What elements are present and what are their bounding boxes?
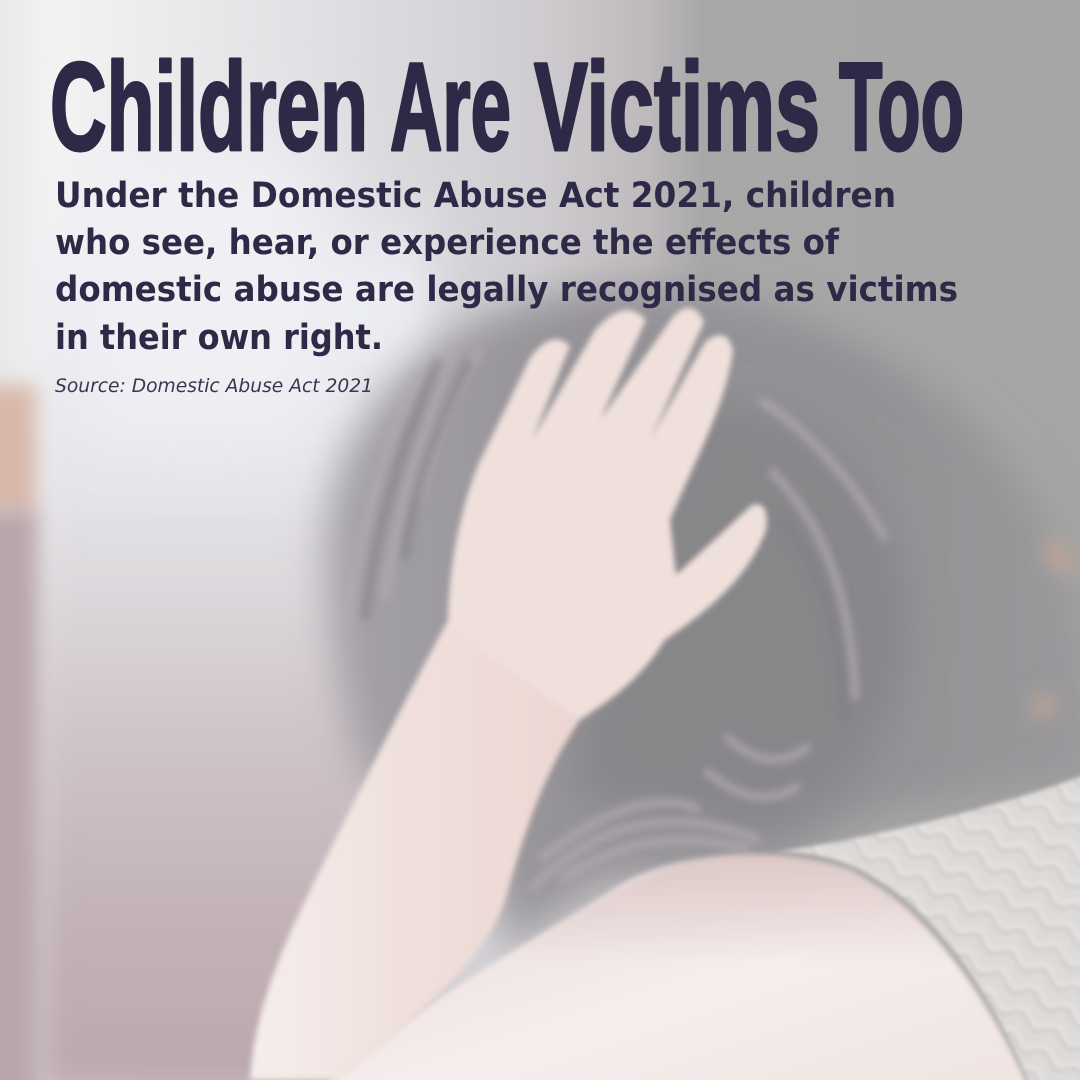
- title: Children: [50, 38, 368, 177]
- hair: [325, 289, 1080, 950]
- body text: who see, hear, or experience the effects of: [55, 223, 840, 263]
- body text: [55, 176, 958, 358]
- shoulder: [320, 854, 1030, 1080]
- title: Are: [390, 38, 511, 177]
- body text: domestic abuse are legally recognised as victims: [55, 270, 958, 310]
- title: Too: [839, 38, 964, 177]
- body text: Under the Domestic Abuse Act 2021, children: [55, 176, 896, 216]
- arm and hand: [250, 308, 767, 1080]
- body text: in their own right.: [55, 318, 383, 358]
- top garment: [775, 775, 1080, 1080]
- source: Source: Domestic Abuse Act 2021: [55, 375, 373, 397]
- title: Victims: [534, 38, 820, 177]
- title: [50, 38, 964, 177]
